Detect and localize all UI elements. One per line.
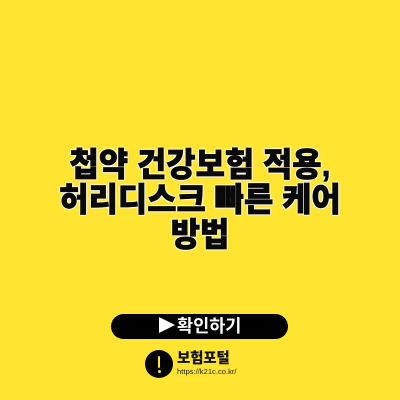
logo: insurance portal	[145, 350, 237, 378]
logo url: https://k21c.co.kr/	[177, 367, 237, 376]
title: 첩약 건강보험 적용,	[70, 146, 330, 183]
icon: exclamation circle	[145, 350, 173, 378]
logo name: 보험포털	[177, 351, 230, 367]
button label: 확인하기	[177, 316, 241, 336]
title: 허리디스크 빠른 케어	[59, 181, 341, 218]
icon: play triangle	[159, 317, 175, 333]
title: 방법	[171, 216, 229, 253]
button: confirm	[111, 314, 288, 339]
title	[58, 146, 341, 253]
